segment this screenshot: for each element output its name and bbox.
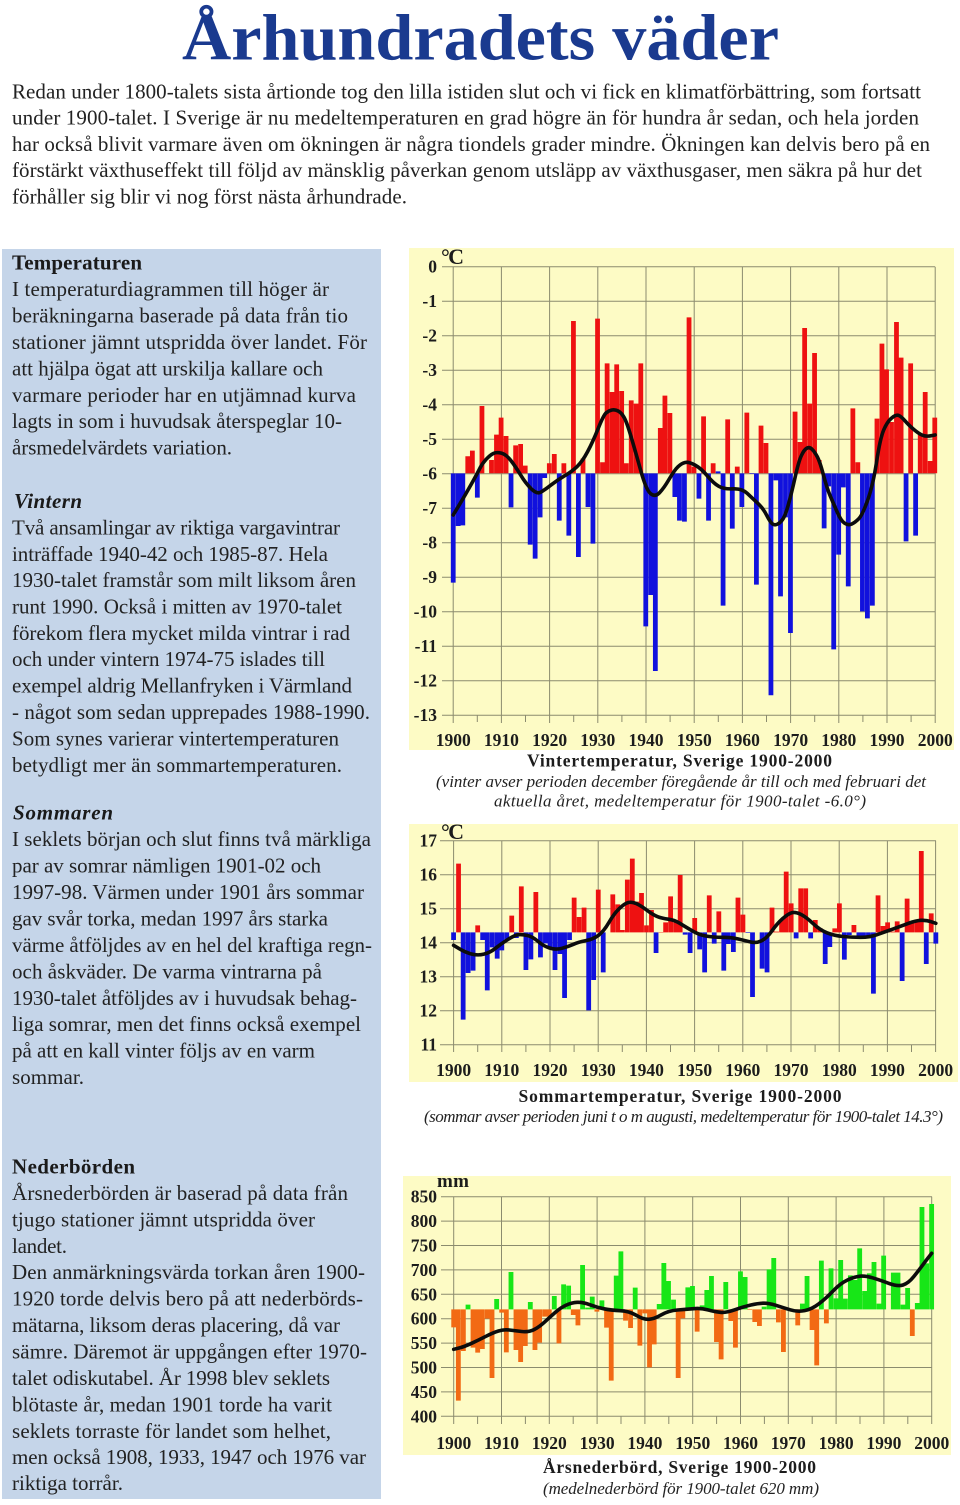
warm summer bars bbox=[459, 851, 931, 932]
text block: Temperaturen: I temperaturdiagrammen till höger är bbox=[12, 277, 329, 301]
winter x axis labels: 1990 bbox=[870, 730, 905, 750]
wet year bars bbox=[468, 1204, 932, 1309]
precipitation x axis labels: 1960 bbox=[723, 1433, 758, 1453]
warm winter bars bbox=[468, 317, 935, 473]
smoothed precipitation curve bbox=[454, 1253, 932, 1349]
precipitation x axis labels bbox=[436, 1433, 949, 1453]
text block: Vintern bbox=[12, 516, 370, 777]
precipitation x axis labels: 1950 bbox=[675, 1433, 710, 1453]
precipitation y axis labels: 650 bbox=[411, 1284, 437, 1304]
text block: Nederbörden: tjugo stationer jämnt utspridda över bbox=[12, 1208, 315, 1232]
text block: Vintern: och under vintern 1974-75 islades till bbox=[12, 647, 325, 671]
text block: Vintern: betydligt mer än sommartemperaturen. bbox=[12, 753, 342, 777]
text block: Sommaren: värme åtföljdes av en hel del kraftiga regn- bbox=[12, 933, 372, 957]
summer x axis labels: 1990 bbox=[870, 1060, 905, 1080]
winter x axis labels: 1910 bbox=[484, 730, 519, 750]
summer y axis labels bbox=[420, 831, 437, 1055]
summer y axis labels: 16 bbox=[420, 865, 437, 885]
cold summer bars bbox=[454, 932, 936, 1020]
winter y axis labels: -1 bbox=[422, 291, 437, 311]
summer x axis labels bbox=[436, 1060, 953, 1080]
text block: Sommaren: på att en kall vinter följs av en varm bbox=[12, 1038, 315, 1062]
smoothed winter curve bbox=[453, 410, 935, 525]
summer y axis labels: 15 bbox=[420, 899, 437, 919]
text block: Nederbörden: blötaste år, medan 1901 torde ha varit bbox=[12, 1392, 332, 1416]
text block: Vintern: - något som sedan upprepades 1988-1990. bbox=[12, 700, 370, 724]
text block: Temperaturen: beräkningarna baserade på data från tio bbox=[12, 304, 348, 328]
summer x axis labels: 1980 bbox=[822, 1060, 857, 1080]
precipitation y axis labels: 600 bbox=[411, 1309, 437, 1329]
caption: winter: Vintertemperatur, Sverige 1900-2000 bbox=[527, 750, 832, 770]
text block: Vintern: 1930-talet framstår som milt liksom åren bbox=[12, 568, 356, 592]
winter y axis labels: -12 bbox=[414, 671, 437, 691]
winter y axis labels: -8 bbox=[422, 533, 437, 553]
text block: Sommaren: gav svår torka, medan 1997 års starka bbox=[12, 906, 329, 930]
summer x axis labels: 2000 bbox=[918, 1060, 953, 1080]
text block: Vintern: exempel aldrig Mellanfryken i Värmland bbox=[12, 674, 352, 698]
text block: Temperaturen: lagts in som i huvudsak återspeglar 10- bbox=[12, 409, 342, 433]
precipitation x axis labels: 1920 bbox=[532, 1433, 567, 1453]
winter x axis labels: 1960 bbox=[725, 730, 760, 750]
intro text block: Redan under 1800-talets sista årtionde tog den lilla istiden slut och vi fick en klimatförbättring, som fortsatt bbox=[12, 79, 921, 103]
caption: precipitation: (medelnederbörd för 1900-talet 620 mm) bbox=[543, 1479, 819, 1498]
text block: Nederbörden: 1920 torde delvis bero på att nederbörds- bbox=[12, 1287, 363, 1311]
heading: Nederbörden: Nederbörden bbox=[12, 1154, 135, 1178]
intro text block bbox=[12, 79, 930, 208]
summer x axis labels: 1960 bbox=[725, 1060, 761, 1080]
text block: Nederbörden: mätarna, liksom deras placering, då var bbox=[12, 1313, 340, 1337]
precipitation x axis labels: 1930 bbox=[580, 1433, 615, 1453]
text block: Vintern: förekom flera mycket milda vintrar i rad bbox=[12, 621, 350, 645]
intro text block: förhåller sig blir vi nog först nästa århundrade. bbox=[12, 184, 407, 208]
summer x axis labels: 1910 bbox=[484, 1060, 520, 1080]
text block: Sommaren: liga somrar, men det finns också exempel bbox=[12, 1012, 361, 1036]
text block: Temperaturen: varmare perioder har en utjämnad kurva bbox=[12, 383, 357, 407]
text block: Sommaren: 1930-talet åtföljdes av i huvudsak behag- bbox=[12, 986, 357, 1010]
winter x axis labels: 1900 bbox=[436, 730, 471, 750]
text block: Temperaturen bbox=[12, 277, 367, 460]
summer y axis labels: 11 bbox=[420, 1035, 437, 1055]
summer y axis labels: 13 bbox=[420, 967, 437, 987]
winter y axis labels: -4 bbox=[422, 395, 437, 415]
text block: Nederbörden: Den anmärkningsvärda torkan åren 1900- bbox=[12, 1260, 365, 1284]
precipitation y axis labels: 400 bbox=[411, 1406, 437, 1426]
cold winter bars bbox=[453, 471, 916, 695]
winter y axis labels bbox=[414, 257, 437, 725]
precipitation y axis labels: 550 bbox=[411, 1333, 437, 1353]
winter y axis labels: -7 bbox=[422, 498, 437, 518]
precipitation x axis labels: 1990 bbox=[866, 1433, 902, 1453]
winter y axis labels: -6 bbox=[422, 464, 437, 484]
dry year bars bbox=[454, 1309, 912, 1401]
winter x axis labels: 1980 bbox=[821, 730, 857, 750]
heading: Temperaturen: Temperaturen bbox=[12, 250, 142, 274]
text block: Nederbörden: men också 1908, 1933, 1947 och 1976 var bbox=[12, 1445, 366, 1469]
text block: Nederbörden: riktiga torrår. bbox=[12, 1471, 123, 1495]
text block: Sommaren: par av somrar nämligen 1901-02 och bbox=[12, 853, 322, 877]
precipitation y axis labels: 850 bbox=[411, 1187, 437, 1207]
winter x axis labels: 1930 bbox=[580, 730, 616, 750]
winter y axis labels: 0 bbox=[428, 257, 437, 277]
summer x axis labels: 1920 bbox=[532, 1060, 568, 1080]
intro text block: förstärkt växthuseffekt till följd av mänsklig påverkan genom utsläpp av växthusgaser, men säkra på hur det bbox=[12, 158, 922, 182]
precipitation y axis labels: 800 bbox=[411, 1211, 437, 1231]
precipitation x axis labels: 1970 bbox=[771, 1433, 806, 1453]
text block: Vintern: inträffade 1940-42 och 1985-87. Hela bbox=[12, 542, 329, 566]
winter unit label: °C bbox=[441, 244, 464, 269]
text block: Nederbörden: landet. bbox=[12, 1234, 67, 1258]
winter y axis labels: -3 bbox=[422, 360, 437, 380]
text block: Temperaturen: årsmedelvärdets variation. bbox=[12, 436, 232, 460]
caption: winter: aktuella året, medeltemperatur för 1900-talet -6.0°) bbox=[494, 792, 866, 810]
text block: Sommaren: I seklets början och slut finns två märkliga bbox=[12, 827, 372, 851]
heading: Sommaren: Sommaren bbox=[13, 800, 113, 824]
winter y axis labels: -11 bbox=[415, 636, 437, 656]
summer x axis labels: 1940 bbox=[629, 1060, 664, 1080]
precipitation unit label: mm bbox=[437, 1171, 469, 1192]
text block: Temperaturen: stationer jämnt utspridda över landet. För bbox=[12, 330, 367, 354]
intro text block: under 1900-talet. I Sverige är nu medeltemperaturen en grad högre än för hundra år sedan, och hela jorden bbox=[12, 106, 920, 130]
precipitation y axis labels bbox=[411, 1187, 437, 1426]
winter y axis labels: -5 bbox=[422, 429, 437, 449]
intro text block: har också blivit varmare även om ökningen är några tiondels grader mindre. Ökningen kan delvis bero på en bbox=[12, 132, 930, 156]
caption: precipitation bbox=[543, 1457, 819, 1498]
caption: summer bbox=[424, 1086, 943, 1126]
title: Århundradets väder bbox=[182, 2, 779, 74]
summer x axis labels: 1930 bbox=[581, 1060, 616, 1080]
winter y axis labels: -2 bbox=[422, 326, 437, 346]
precipitation x axis labels: 1900 bbox=[436, 1433, 471, 1453]
chart: winter temperature bbox=[409, 244, 954, 750]
text block: Vintern: runt 1990. Också i mitten av 1970-talet bbox=[12, 595, 342, 619]
summer y axis labels: 14 bbox=[420, 933, 437, 953]
caption: precipitation: Årsnederbörd, Sverige 1900-2000 bbox=[543, 1457, 816, 1477]
precipitation y axis labels: 500 bbox=[411, 1358, 437, 1378]
caption: summer: (sommar avser perioden juni t o m augusti, medeltemperatur för 1900-talet 14.3°) bbox=[424, 1107, 943, 1126]
summer x axis labels: 1970 bbox=[774, 1060, 809, 1080]
text block: Nederbörden: Årsnederbörden är baserad på data från bbox=[12, 1181, 348, 1205]
panel: left text column bbox=[2, 249, 381, 1499]
chart: annual precipitation bbox=[403, 1171, 951, 1455]
winter y axis labels: -10 bbox=[414, 602, 437, 622]
winter y axis labels: -9 bbox=[422, 567, 437, 587]
text block: Vintern: Som synes varierar vintertemperaturen bbox=[12, 727, 340, 751]
precipitation x axis labels: 1940 bbox=[627, 1433, 663, 1453]
text block: Vintern: Två ansamlingar av riktiga vargavintrar bbox=[12, 516, 340, 540]
winter x axis labels: 1920 bbox=[532, 730, 567, 750]
caption: winter bbox=[436, 750, 927, 810]
text block: Sommaren: 1997-98. Värmen under 1901 års sommar bbox=[12, 880, 364, 904]
winter x axis labels: 1950 bbox=[677, 730, 712, 750]
text block: Sommaren: och åskväder. De varma vintrarna på bbox=[12, 959, 323, 983]
precipitation x axis labels: 1980 bbox=[819, 1433, 854, 1453]
heading: Vintern: Vintern bbox=[14, 489, 82, 513]
text block: Nederbörden: seklets torraste för landet som helhet, bbox=[12, 1419, 331, 1443]
winter x axis labels: 2000 bbox=[918, 730, 953, 750]
caption: summer: Sommartemperatur, Sverige 1900-2000 bbox=[518, 1086, 842, 1106]
summer x axis labels: 1900 bbox=[436, 1060, 471, 1080]
smoothed summer curve bbox=[454, 902, 936, 955]
precipitation y axis labels: 750 bbox=[411, 1236, 437, 1256]
winter x axis labels: 1940 bbox=[628, 730, 664, 750]
winter x axis labels: 1970 bbox=[773, 730, 808, 750]
caption: winter: (vinter avser perioden december föregående år till och med februari det bbox=[436, 772, 927, 791]
precipitation x axis labels: 1910 bbox=[484, 1433, 519, 1453]
text block: Nederbörden: talet odiskutabel. År 1998 blev seklets bbox=[12, 1366, 330, 1390]
winter x axis labels bbox=[436, 730, 953, 750]
summer x axis labels: 1950 bbox=[677, 1060, 712, 1080]
precipitation x axis labels: 2000 bbox=[914, 1433, 949, 1453]
text block: Nederbörden bbox=[12, 1181, 367, 1495]
text block: Temperaturen: att hjälpa ögat att urskilja kallare och bbox=[12, 356, 324, 380]
winter y axis labels: -13 bbox=[414, 705, 437, 725]
text block: Nederbörden: sämre. Däremot är uppgången efter 1970- bbox=[12, 1339, 367, 1363]
summer y axis labels: 17 bbox=[420, 831, 437, 851]
text block: Sommaren bbox=[12, 827, 372, 1089]
precipitation y axis labels: 450 bbox=[411, 1382, 437, 1402]
text block: Sommaren: sommar. bbox=[12, 1065, 84, 1089]
summer unit label: °C bbox=[441, 819, 464, 844]
chart: summer temperature bbox=[409, 819, 958, 1082]
summer y axis labels: 12 bbox=[420, 1001, 437, 1021]
precipitation y axis labels: 700 bbox=[411, 1260, 437, 1280]
